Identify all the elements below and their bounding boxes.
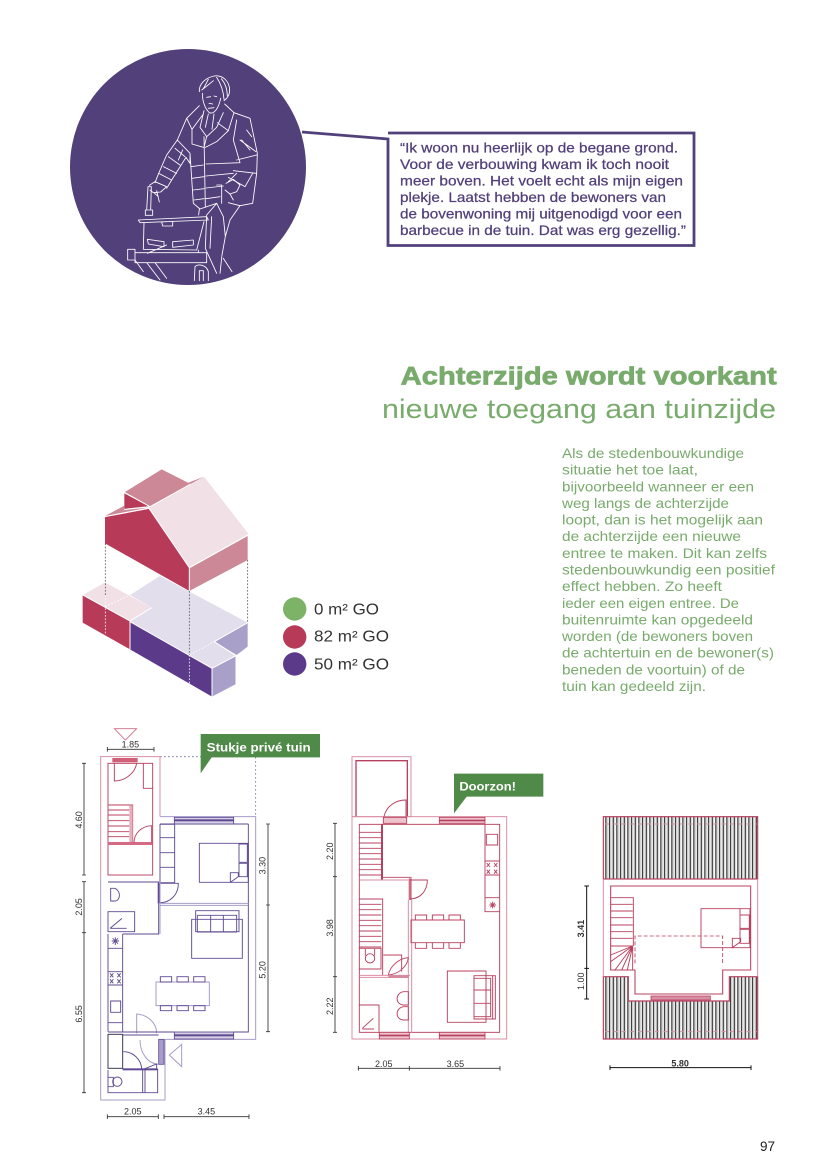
floor plan: attic <box>576 817 758 1070</box>
bottom wall and window <box>108 1032 234 1039</box>
dimensions: 3.45 <box>198 1107 215 1117</box>
dining table <box>156 982 209 1006</box>
walls <box>352 817 507 1039</box>
callout: private garden <box>201 734 320 773</box>
dimensions: 2.05 <box>124 1107 141 1117</box>
body text: buitenruimte kan opgedeeld <box>562 612 753 627</box>
top window <box>174 817 234 824</box>
interior door <box>410 880 427 899</box>
legs and bag <box>199 203 240 273</box>
body text: effect hebben. Zo heeft <box>562 579 722 594</box>
body text <box>561 446 775 694</box>
heading: Achterzijde wordt voorkant <box>401 362 777 390</box>
lower volume <box>83 576 248 697</box>
quote text: barbecue in de tuin. Dat was erg gezellig.” <box>400 223 686 238</box>
upper volume <box>105 469 249 591</box>
floor plan: ground floor <box>74 729 320 1119</box>
bathroom <box>108 882 160 934</box>
sofa and rug <box>192 911 242 958</box>
storage <box>108 1034 123 1068</box>
page number: 97 <box>760 1139 775 1154</box>
body text: weg langs de achterzijde <box>561 496 729 511</box>
stairs upper <box>359 832 381 875</box>
body text: ieder een eigen entree. De <box>562 596 739 611</box>
quote text: Voor de verbouwing kwam ik toch nooit <box>400 157 669 172</box>
scarf and collar <box>187 104 234 147</box>
quote text: “Ik woon nu heerlijk op de begane grond. <box>400 140 678 155</box>
speech bubble with quote <box>302 132 694 246</box>
dimensions: 2.05 <box>74 898 84 916</box>
body text: worden (de bewoners boven <box>561 629 753 644</box>
dimensions: 3.30 <box>257 857 267 874</box>
hands <box>149 179 240 202</box>
dimensions: 4.60 <box>74 811 84 829</box>
walls <box>603 879 758 994</box>
body text: stedenbouwkundig een positief <box>562 562 775 578</box>
toilet door <box>383 955 408 975</box>
callout: doorzon: Doorzon! <box>459 780 516 794</box>
dimensions: 2.20 <box>325 842 335 860</box>
bed <box>199 843 248 882</box>
head <box>199 76 230 113</box>
sinks <box>397 992 408 1020</box>
bottom windows <box>379 1032 485 1039</box>
toilet <box>359 948 381 969</box>
jacket <box>155 113 257 209</box>
speech bubble outline <box>302 132 694 246</box>
body text: entree te maken. Dit kan zelfs <box>562 546 767 561</box>
garden boundary <box>160 757 256 817</box>
dashed ceiling line <box>635 936 723 963</box>
legend item: 82 m2 GO: 82 m² GO <box>314 628 389 646</box>
kitchen <box>485 824 500 912</box>
body text: loopt, dan is het mogelijk aan <box>562 513 763 528</box>
body text: de achterzijde een nieuwe <box>562 529 741 544</box>
wardrobes <box>160 824 175 883</box>
dimensions: 6.55 <box>74 1005 84 1023</box>
roof hatching <box>603 817 758 1039</box>
body text: Als de stedenbouwkundige <box>562 446 744 461</box>
entrance door <box>140 1039 164 1064</box>
quote text: plekje. Laatst hebben de bewoners van <box>400 190 666 205</box>
legend item: 0 m2 GO: 0 m² GO <box>314 602 379 618</box>
quote text: meer boven. Het voelt echt als mijn eigen <box>400 173 683 188</box>
balcony <box>352 757 411 817</box>
callout: doorzon <box>454 774 543 813</box>
dimensions: 1.00 <box>576 972 586 990</box>
entrance marker top <box>114 729 137 740</box>
kitchen <box>108 934 123 1032</box>
body text: situatie het toe laat, <box>562 463 698 478</box>
portrait circle with resident and rollator <box>70 49 306 285</box>
dimensions: 5.20 <box>257 961 267 979</box>
dimensions <box>576 886 751 1070</box>
quote text <box>400 140 686 238</box>
body text: bijvoorbeeld wanneer er een <box>562 479 754 494</box>
floor plan: first floor <box>325 757 543 1071</box>
bedroom door <box>158 883 178 903</box>
red annex <box>101 757 160 878</box>
sofa and rug <box>447 971 495 1022</box>
body text: de achtertuin en de bewoner(s) <box>562 646 774 661</box>
isometric exploded house diagram <box>83 469 249 697</box>
purple outline <box>101 817 256 1100</box>
quote text: de bovenwoning mij uitgenodigd voor een <box>400 207 682 222</box>
partition <box>160 903 248 905</box>
stairs <box>611 898 633 970</box>
dimensions: 2.05 <box>375 1059 392 1069</box>
dimensions: 2.22 <box>325 997 335 1015</box>
dimensions: 3.98 <box>325 919 335 937</box>
heading <box>382 362 777 424</box>
heading: nieuwe toegang aan tuinzijde <box>382 394 776 424</box>
entrance marker side <box>169 1044 182 1067</box>
toilet room <box>108 1052 158 1093</box>
bed <box>701 909 750 948</box>
door to hall <box>137 1014 157 1033</box>
callout: private garden: Stukje privé tuin <box>207 741 311 755</box>
dormer window <box>651 996 710 1000</box>
dimensions: 5.80 <box>671 1058 689 1068</box>
dimensions: 3.65 <box>447 1059 464 1069</box>
rollator <box>128 185 222 281</box>
dimensions <box>74 740 270 1119</box>
legend <box>283 597 389 676</box>
projection dashes <box>105 543 248 683</box>
dimensions <box>325 823 500 1071</box>
dimensions: 3.41 <box>576 920 586 937</box>
body text: beneden de voortuin) of de <box>562 662 745 677</box>
shower <box>359 1005 379 1032</box>
body text: tuin kan gedeeld zijn. <box>562 679 706 694</box>
legend item: 50 m2 GO: 50 m² GO <box>314 656 389 674</box>
dimensions: 1.85 <box>122 740 139 750</box>
stairs lower <box>359 899 383 975</box>
top door and window <box>383 800 485 823</box>
partition <box>359 975 410 977</box>
dining table <box>411 915 464 948</box>
